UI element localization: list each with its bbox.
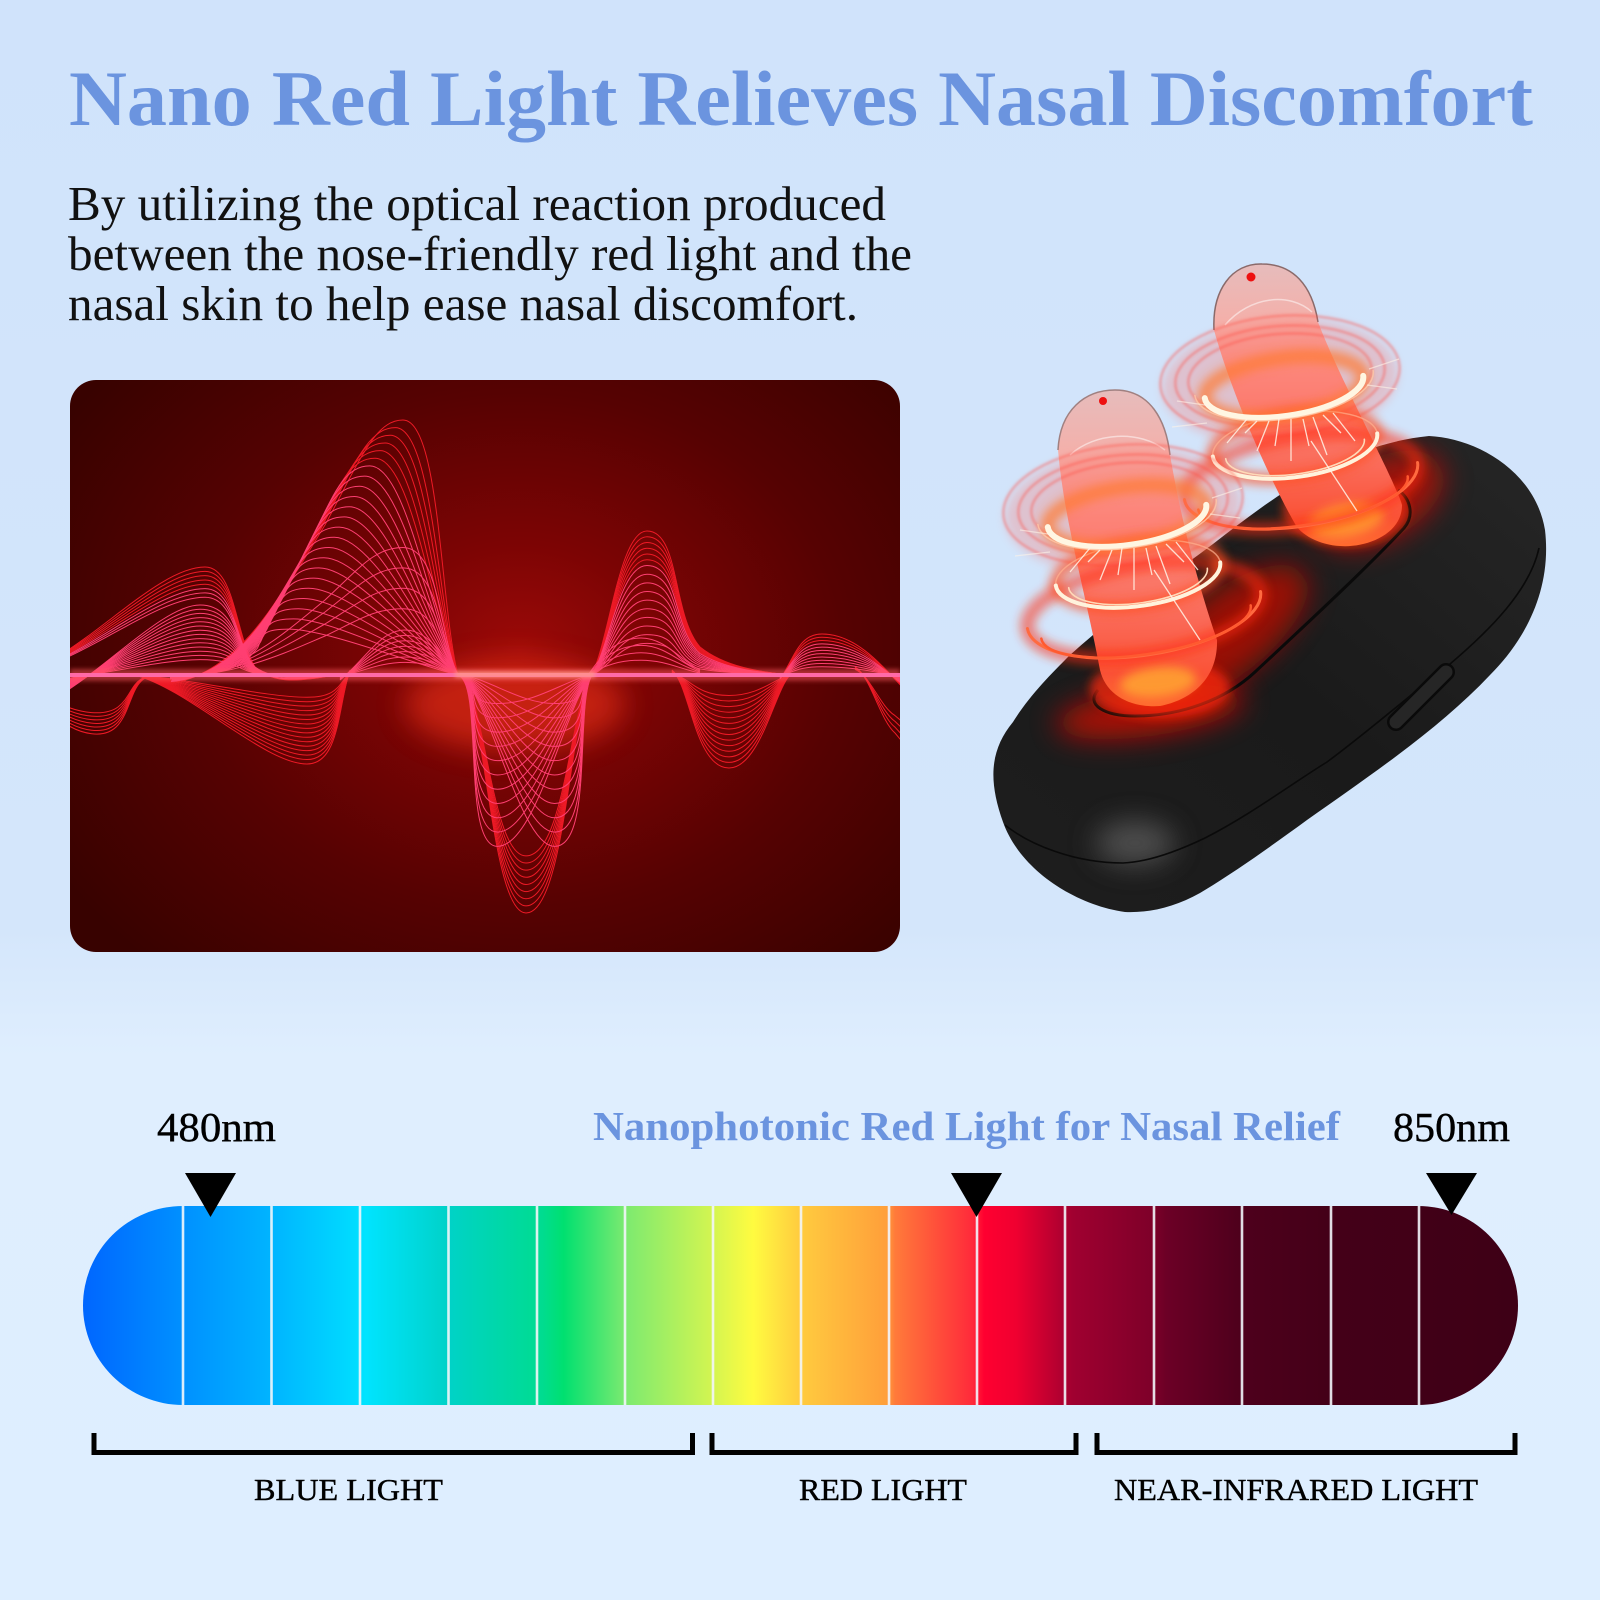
device: nasal red-light therapy unit [993, 264, 1546, 912]
title: Nano Red Light Relieves Nasal Discomfort [69, 55, 1533, 142]
nozzle: front [1058, 390, 1230, 718]
label: red light: RED LIGHT [799, 1472, 967, 1507]
label: blue light: BLUE LIGHT [254, 1472, 443, 1507]
nozzle: back [1214, 264, 1407, 546]
intro text block: By utilizing the optical reaction produced [68, 176, 886, 231]
heading: nanophotonic wavelength label: Nanophotonic Red Light for Nasal Relief [593, 1103, 1341, 1149]
wave lines [55, 420, 905, 913]
bracket: near-infrared light [1097, 1433, 1515, 1452]
label: 850nm: 850nm [1393, 1104, 1510, 1150]
spectrum bar [83, 1206, 1518, 1405]
rings: front nozzle [998, 435, 1268, 673]
wave centre line [70, 669, 900, 681]
intro text block: nasal skin to help ease nasal discomfort. [68, 276, 858, 331]
bracket: blue light [94, 1433, 692, 1452]
marker: red light arrow [951, 1173, 1002, 1217]
intro text block [68, 176, 912, 331]
seam line [1005, 548, 1539, 863]
bracket: red light [712, 1433, 1076, 1452]
intro text block: between the nose-friendly red light and the [68, 226, 912, 281]
panel: red light wave [55, 380, 905, 952]
label: near-infrared light: NEAR-INFRARED LIGHT [1114, 1472, 1478, 1507]
marker: 480nm arrow [185, 1173, 236, 1217]
top groove [1094, 490, 1410, 716]
device body [993, 430, 1546, 912]
side button [1396, 672, 1446, 722]
marker: 850nm arrow [1426, 1173, 1477, 1215]
label: 480nm: 480nm [157, 1104, 276, 1150]
rings: back nozzle [1155, 306, 1425, 544]
